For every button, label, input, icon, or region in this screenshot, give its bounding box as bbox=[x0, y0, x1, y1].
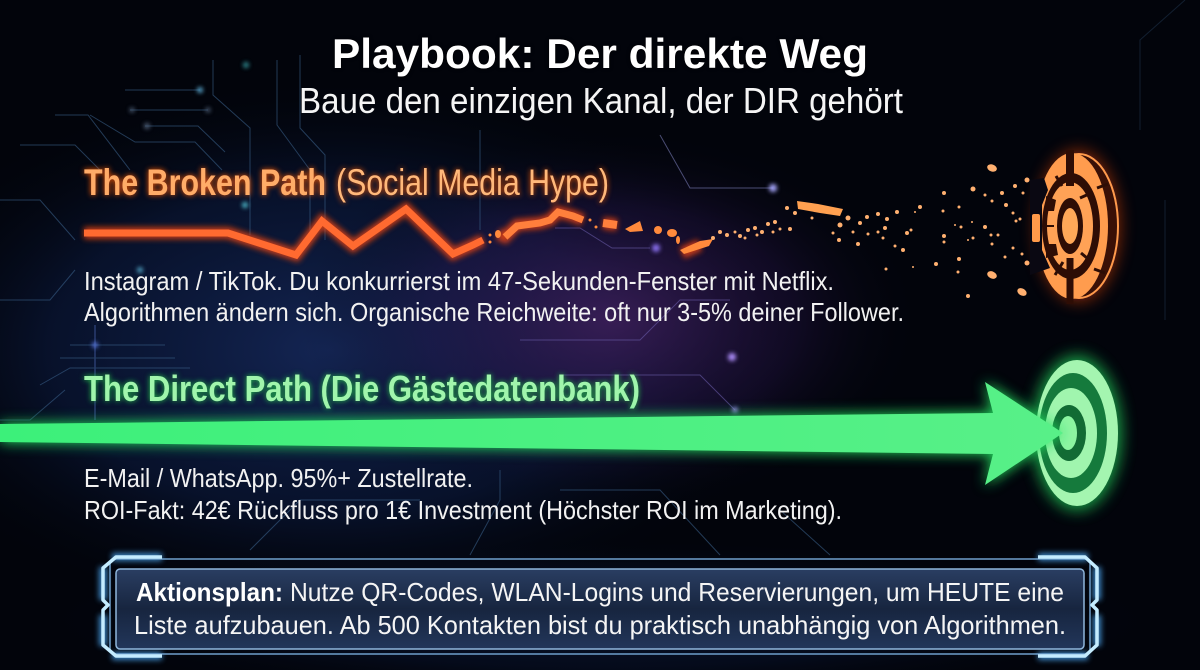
heading: the broken path: The Broken Path bbox=[84, 162, 326, 203]
heading: the broken path: (Social Media Hype) bbox=[336, 162, 609, 203]
shattered left edge bbox=[1030, 178, 1050, 275]
callout: aktionsplan: Nutze QR-Codes, WLAN-Logins und Reservierungen, um HEUTE eine bbox=[290, 577, 1064, 607]
callout: aktionsplan bbox=[103, 557, 1097, 656]
heading: the broken path bbox=[84, 162, 609, 203]
arrow: direct path bbox=[0, 382, 1063, 485]
body text: broken path bbox=[84, 266, 904, 327]
body text: direct path bbox=[84, 463, 842, 525]
title: Playbook: Der direkte Weg bbox=[332, 30, 868, 77]
subtitle: Baue den einzigen Kanal, der DIR gehört bbox=[299, 80, 903, 121]
body text: direct path: ROI-Fakt: 42€ Rückfluss pro 1€ Investment (Höchster ROI im Marketing). bbox=[84, 495, 842, 525]
title: Playbook: Der direkte Weg bbox=[332, 30, 868, 77]
heading: the direct path: The Direct Path (Die Gästedatenbank) bbox=[84, 368, 640, 409]
body text: direct path: E-Mail / WhatsApp. 95%+ Zustellrate. bbox=[84, 463, 473, 493]
callout: aktionsplan: Aktionsplan: bbox=[136, 577, 283, 607]
body text: broken path: Algorithmen ändern sich. Organische Reichweite: oft nur 3-5% deiner Follower. bbox=[84, 297, 904, 327]
heading: the broken path: The Broken Path bbox=[84, 162, 326, 203]
heading: the broken path: (Social Media Hype) bbox=[336, 162, 609, 203]
broken path line bbox=[84, 163, 1037, 298]
heading: the direct path: The Direct Path (Die Gästedatenbank) bbox=[84, 368, 640, 409]
scattered particles bbox=[711, 163, 1037, 298]
icon: shattered orange target bbox=[1030, 150, 1120, 304]
icon: green target bbox=[1033, 356, 1121, 510]
body text: broken path: Instagram / TikTok. Du konkurrierst im 47-Sekunden-Fenster mit Netflix. bbox=[84, 266, 834, 296]
callout: aktionsplan: Liste aufzubauen. Ab 500 Kontakten bist du praktisch unabhängig von Algorithmen. bbox=[134, 610, 1066, 640]
